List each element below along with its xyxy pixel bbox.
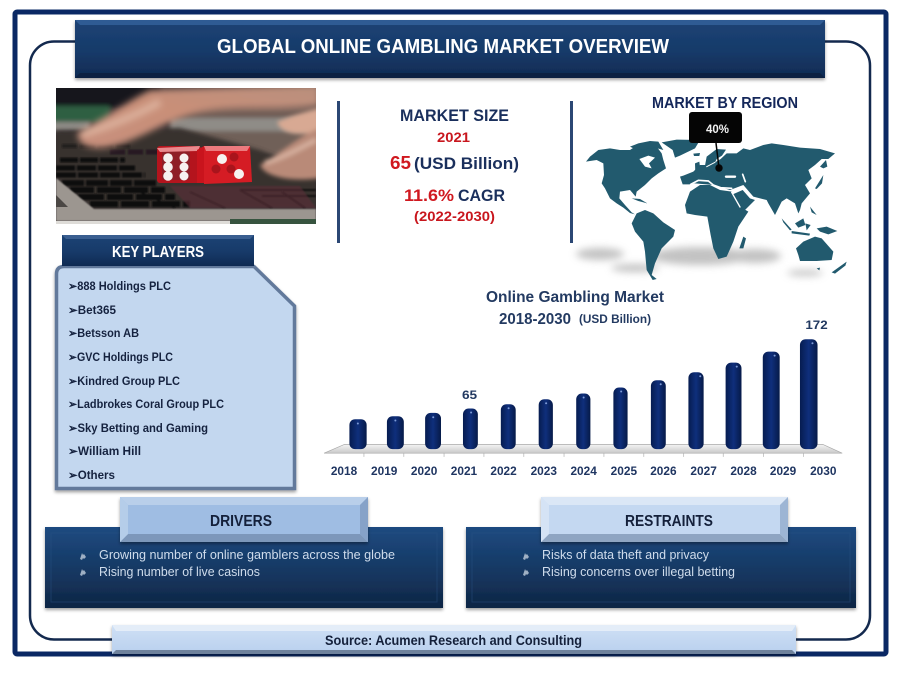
source bar xyxy=(112,625,796,654)
key players names: ➢GVC Holdings PLC xyxy=(68,352,173,364)
keys xyxy=(56,146,316,208)
key players names: ➢Ladbrokes Coral Group PLC xyxy=(68,399,224,411)
panel: drivers xyxy=(45,497,443,608)
laptop edge xyxy=(56,178,316,221)
data labels: 172 xyxy=(805,319,828,332)
heading: market by region: MARKET BY REGION xyxy=(652,95,798,112)
callout: 40%: 40% xyxy=(706,122,729,136)
title: GLOBAL ONLINE GAMBLING MARKET OVERVIEW xyxy=(217,36,669,58)
drivers list xyxy=(80,548,395,579)
data labels xyxy=(462,319,828,402)
key players header: KEY PLAYERS xyxy=(112,244,204,261)
map: Americas xyxy=(586,140,701,280)
data labels: 65 xyxy=(462,389,478,402)
keyboard base xyxy=(56,125,275,180)
divider: left xyxy=(337,101,340,243)
chart title: 2018-2030 xyxy=(499,311,571,328)
chart title: Online Gambling Market xyxy=(486,289,664,306)
chart title xyxy=(486,289,664,328)
drivers body xyxy=(45,527,443,608)
year axis labels: 2027 xyxy=(690,465,717,478)
restraints list: Rising concerns over illegal betting xyxy=(542,565,735,579)
key players names: ➢888 Holdings PLC xyxy=(68,281,171,293)
key players names: ➢Others xyxy=(68,470,115,482)
title banner xyxy=(75,20,825,78)
market size block: (2022-2030) xyxy=(414,209,495,224)
year axis labels: 2025 xyxy=(611,465,638,478)
right hand xyxy=(260,108,320,179)
restraints list: Risks of data theft and privacy xyxy=(542,548,710,562)
key players names: ➢Bet365 xyxy=(68,305,117,317)
key players names: ➢Sky Betting and Gaming xyxy=(68,423,208,435)
market size block: 2021 xyxy=(437,130,471,145)
photo background xyxy=(56,88,316,156)
year axis labels: 2029 xyxy=(770,465,797,478)
map: Eurasia, Africa, Oceania xyxy=(680,143,847,274)
year axis labels: 2023 xyxy=(531,465,557,478)
photo: hands and dice on keyboard xyxy=(50,82,320,224)
market size block: MARKET SIZE xyxy=(400,106,509,125)
year axis labels: 2030 xyxy=(810,465,837,478)
market size block: 11.6% xyxy=(404,186,454,205)
restraints header xyxy=(541,497,788,542)
divider: right xyxy=(570,101,573,243)
bars xyxy=(349,339,818,449)
drivers list: Rising number of live casinos xyxy=(99,565,260,579)
callout: 40% xyxy=(689,112,742,172)
bar highlights xyxy=(357,342,813,425)
year axis labels xyxy=(331,465,837,478)
year axis labels: 2022 xyxy=(490,465,517,478)
world map xyxy=(576,112,847,280)
market size block: 65 xyxy=(390,153,411,173)
year axis labels: 2024 xyxy=(570,465,597,478)
drivers header xyxy=(120,497,368,542)
chart floor xyxy=(324,445,842,453)
key players names: ➢Betsson AB xyxy=(68,328,139,340)
key players names xyxy=(68,281,224,482)
market size block: (USD Billion) xyxy=(414,154,519,173)
map shadow xyxy=(576,247,823,276)
market size block xyxy=(390,106,519,224)
source bar: Source: Acumen Research and Consulting xyxy=(325,633,582,648)
die: five xyxy=(197,146,252,184)
key players list body xyxy=(56,266,294,488)
year axis labels: 2019 xyxy=(371,465,398,478)
chart title: (USD Billion) xyxy=(579,314,651,326)
restraints header: RESTRAINTS xyxy=(625,513,713,530)
year axis labels: 2026 xyxy=(650,465,677,478)
key players names: ➢William Hill xyxy=(68,446,141,458)
die: six xyxy=(157,146,201,183)
drivers list: Growing number of online gamblers across the globe xyxy=(99,548,395,562)
left hand xyxy=(78,84,320,148)
year axis labels: 2021 xyxy=(451,465,478,478)
restraints body xyxy=(466,527,856,608)
panel: key players xyxy=(56,235,294,488)
market size block: CAGR xyxy=(458,186,505,205)
key players names: ➢Kindred Group PLC xyxy=(68,376,180,388)
key players header xyxy=(62,235,254,266)
bar chart xyxy=(324,319,842,478)
restraints list xyxy=(523,548,735,579)
year axis labels: 2018 xyxy=(331,465,358,478)
year axis labels: 2028 xyxy=(730,465,757,478)
year axis labels: 2020 xyxy=(411,465,438,478)
drivers header: DRIVERS xyxy=(210,513,272,530)
panel: restraints xyxy=(466,497,856,608)
